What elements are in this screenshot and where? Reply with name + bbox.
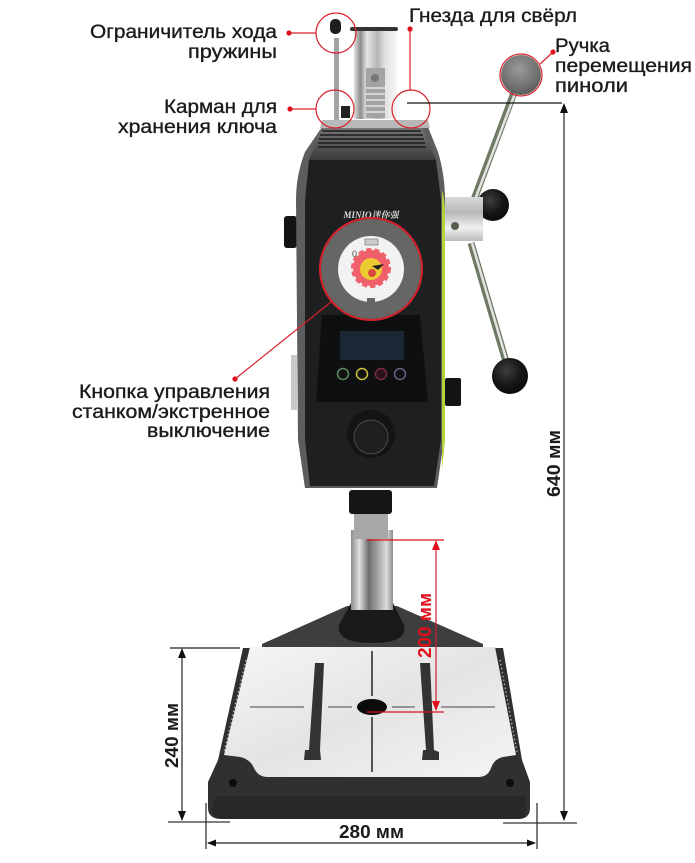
rotary knob [347,410,395,458]
label: quill handle: пиноли [555,76,628,97]
column base and table [208,490,530,819]
table slots [304,663,324,760]
emergency stop button [321,219,421,319]
label: quill handle: Ручка [555,36,610,57]
label: control button: выключение [147,421,270,442]
dimension: height 640 mm: 640 мм [544,430,564,497]
logo text: MINIQ迷你强 [342,210,400,220]
label: key pocket: Карман для [164,97,277,118]
label: quill handle: перемещения [555,56,692,77]
quill and spring stop rod [330,19,398,123]
dimension: width 280 mm: 280 мм [339,822,404,842]
label: control button: Кнопка управления [79,382,270,403]
label: quill handle [555,36,692,97]
label: spring stop [90,22,277,63]
table plate [224,647,516,777]
label: control button [72,382,270,442]
label: key pocket [118,97,277,138]
label: key pocket: хранения ключа [118,117,277,138]
dimension: width 280 mm [206,803,537,849]
dimension: table depth 240 mm [162,648,240,822]
label: drill sockets: Гнезда для свёрл [409,6,577,27]
callout dots [232,26,556,382]
callout circles and leader lines [235,13,553,379]
lever arm [445,55,541,394]
label: spring stop: Ограничитель хода [90,22,277,43]
emergency stop button: 0 [352,249,357,259]
table rulers [224,660,517,752]
side knobs and bolt [284,216,461,410]
dimension: spindle to table 200 mm: 200 мм [415,593,435,658]
dimension: height 640 mm [407,103,577,823]
dimension: spindle to table 200 mm [367,540,444,712]
machine head [296,120,445,488]
column collar [339,603,404,643]
label: spring stop: пружины [188,42,277,63]
panel: control display [316,315,428,402]
label: control button: станком/экстренное [72,402,270,423]
dimension: table depth 240 mm: 240 мм [162,703,182,768]
